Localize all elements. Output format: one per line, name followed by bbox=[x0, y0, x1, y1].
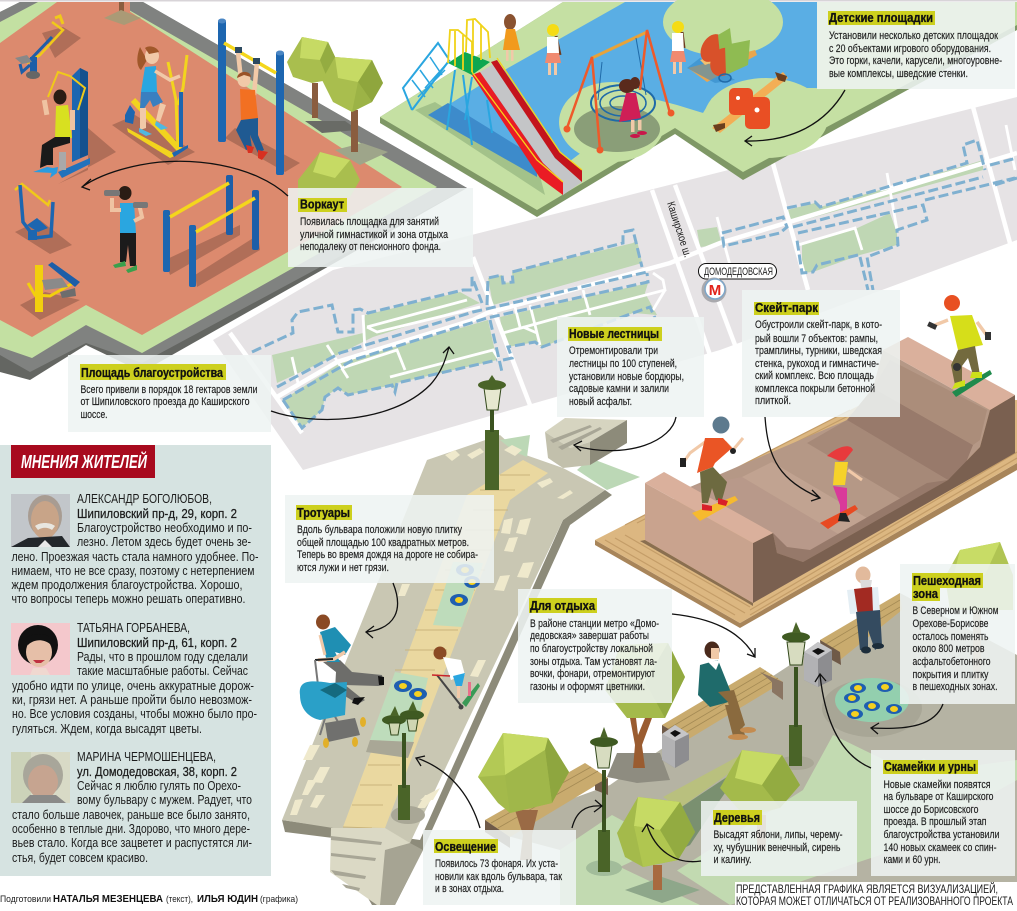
callout: improvement area: шоссе. bbox=[80, 409, 108, 421]
playground platform bbox=[380, 0, 1017, 217]
callout: lighting: Освещение bbox=[435, 840, 496, 854]
callout: benches and bins: шоссе до Борисовского bbox=[884, 804, 978, 816]
opinion: Bogolyubov: Благоустройство необходимо и по- bbox=[77, 520, 252, 535]
callout: skate park: комплекса покрыли бетонной bbox=[755, 383, 875, 395]
playground: spring rocker with parrots bbox=[687, 28, 757, 83]
callout: sidewalks: Вдоль бульвара положили новую плитку bbox=[297, 524, 462, 536]
callout: for rest: дедовская» завершат работы bbox=[530, 630, 649, 642]
bench: middle with sitting man bbox=[662, 642, 783, 752]
opinion: Bogolyubov: ждем продолжения благоустройства. Хорошо, bbox=[12, 577, 242, 592]
opinion: Gorbaneva: Рады, что в прошлом году сделали bbox=[77, 649, 248, 664]
skater: orange shirt bbox=[680, 416, 743, 521]
boulevard: stairs bbox=[330, 418, 627, 905]
opinion: Gorbaneva: ки, грязи нет. А раньше пройти было невозмож- bbox=[12, 692, 252, 707]
callout: skate park: трамплины, турники, шведская bbox=[755, 345, 882, 357]
photo: Gorbaneva bbox=[11, 623, 70, 675]
credits bbox=[0, 893, 298, 905]
callout: improvement area: от Шипиловского проезда до Каширского bbox=[80, 396, 250, 408]
map of the boulevard bbox=[213, 97, 1017, 470]
callout: trees: ху, чубушник венечный, сирень bbox=[714, 842, 841, 854]
arrow: benches and bins bbox=[815, 674, 871, 768]
callout: new stairs: лестницы по 100 ступеней, bbox=[569, 358, 677, 370]
callout: pedestrian zone: в пешеходных зонах. bbox=[912, 681, 998, 693]
callout: pedestrian zone: Пешеходная bbox=[913, 574, 981, 588]
callout: sidewalks: общей площадью 100 квадратных метров. bbox=[297, 537, 469, 549]
lamp: boulevard top bbox=[478, 375, 506, 490]
callout: new stairs: новый асфальт. bbox=[569, 396, 632, 408]
man with stroller bbox=[300, 614, 384, 748]
callout: for rest: Для отдыха bbox=[530, 599, 596, 613]
opinion: Chermoshentseva: стало больше лавочек, раньше все было занято, bbox=[12, 807, 250, 822]
arrow: sidewalks bbox=[366, 583, 398, 638]
tree: right top bbox=[945, 542, 1013, 680]
callout: sidewalks: Теперь во время дождя на дороге не собира- bbox=[297, 549, 478, 561]
arrow: skate park bbox=[765, 417, 820, 501]
callout: trees: Деревья bbox=[714, 811, 760, 825]
callout: new stairs: садовые камни и залили bbox=[569, 383, 669, 395]
callout: lighting bbox=[423, 830, 576, 905]
arrow: children's playgrounds bbox=[745, 90, 845, 146]
heading: residents' opinions bbox=[11, 445, 155, 478]
metro station label: ДОМОДЕДОВСКАЯ bbox=[704, 266, 773, 278]
callout: skate park: стенка, рукоход и гимнастиче- bbox=[755, 358, 879, 370]
arrows: lighting bbox=[416, 756, 602, 828]
boulevard: flower beds bbox=[394, 564, 480, 700]
opinion: Chermoshentseva: Сейчас я люблю гулять по Орехо- bbox=[77, 778, 241, 793]
tree: B bbox=[617, 797, 695, 890]
workout: bench machine bbox=[28, 262, 80, 312]
lamp: double boulevard bbox=[382, 701, 425, 824]
callout: sidewalks: ются лужи и нет грязи. bbox=[297, 562, 389, 574]
urns bbox=[662, 642, 832, 768]
callout: pedestrian zone: зона bbox=[913, 587, 939, 601]
opinion: Bogolyubov: АЛЕКСАНДР БОГОЛЮБОВ, bbox=[77, 491, 212, 506]
callout: benches and bins: Скамейки и урны bbox=[884, 760, 976, 774]
callout: skate park: рый вошли 7 объектов: рампы, bbox=[755, 333, 878, 345]
playground: slide bbox=[403, 19, 582, 195]
workout: parallel bars bbox=[163, 175, 259, 287]
opinion: Gorbaneva: Шипиловский пр-д, 61, корп. 2 bbox=[77, 635, 237, 650]
opinion: Bogolyubov: Шипиловский пр-д, 29, корп. 2 bbox=[77, 506, 237, 521]
metro station label bbox=[698, 264, 776, 302]
callout: children's playgrounds: вые комплексы, шведские стенки. bbox=[829, 68, 968, 80]
opinion: Chermoshentseva: особенно в теплые дни. Здорово, что много дере- bbox=[12, 821, 250, 836]
panel: residents' opinions bbox=[0, 445, 271, 876]
lamp: middle bbox=[586, 727, 622, 876]
callout: for rest: зоны отдыха. Там установят ла- bbox=[530, 656, 657, 668]
arrow: new stairs bbox=[574, 417, 676, 451]
callout: benches and bins: ками и 60 урн. bbox=[884, 854, 940, 866]
credits: (текст), bbox=[166, 894, 193, 905]
workout: woman on elliptical bbox=[125, 46, 188, 158]
opinion: Chermoshentseva: вому бульвару с мужем. Радует, что bbox=[77, 792, 252, 807]
arrow: improvement area bbox=[271, 347, 454, 419]
opinion: Gorbaneva: но. Все условия созданы, чтобы можно было про- bbox=[12, 706, 257, 721]
callout: lighting: новили как вдоль бульвара, так bbox=[435, 871, 562, 883]
credits: (графика) bbox=[260, 894, 298, 905]
visualization disclaimer bbox=[735, 881, 1017, 911]
opinion: Bogolyubov: лезно. Летом здесь будет очень зе- bbox=[77, 534, 251, 549]
callout: benches and bins: Новые скамейки появятся bbox=[884, 779, 991, 791]
workout: cross-trainer bbox=[15, 184, 53, 240]
callout: pedestrian zone: асфальтобетонного bbox=[912, 656, 990, 668]
skater: girl bbox=[820, 446, 862, 529]
workout: man with dumbbells bbox=[104, 186, 148, 273]
callout: new stairs: Отремонтировали три bbox=[569, 345, 658, 357]
opinion: Bogolyubov: лено. Проезжая часть стала намного удобнее. По- bbox=[12, 549, 258, 564]
metro station label: М bbox=[709, 282, 721, 299]
callout: new stairs bbox=[557, 317, 704, 417]
callout: for rest: В районе станции метро «Домо- bbox=[530, 618, 659, 630]
callout: for rest: вочки, фонари, отремонтируют bbox=[530, 668, 655, 680]
credits: ИЛЬЯ ЮДИН bbox=[197, 893, 258, 905]
credits: НАТАЛЬЯ МЕЗЕНЦЕВА bbox=[53, 893, 163, 905]
callout: for rest bbox=[518, 589, 672, 703]
callout: for rest: по благоустройству локальной bbox=[530, 643, 653, 655]
opinion: Bogolyubov: нимаем, что не все сразу, поэтому с нетерпением bbox=[12, 563, 255, 578]
tree: large A bbox=[478, 733, 569, 860]
workout: pull-up bars with man bbox=[218, 18, 284, 175]
workout platform bbox=[0, 2, 467, 380]
opinion: Gorbaneva: такие масштабные работы. Сейчас bbox=[77, 663, 248, 678]
callout: workout bbox=[288, 188, 473, 267]
boy on scooter bbox=[432, 646, 480, 710]
callout: skate park: Обустроили скейт-парк, в кото- bbox=[755, 319, 882, 331]
opinion: Bogolyubov: что вопросы теперь можно решать оперативно. bbox=[12, 591, 246, 606]
callout: pedestrian zone: около 800 метров bbox=[912, 643, 985, 655]
playground: swing with girl bbox=[564, 30, 674, 154]
callout: skate park bbox=[742, 290, 900, 417]
playground: kids bbox=[503, 14, 686, 75]
bench: lower bbox=[485, 763, 608, 848]
lamp: right bbox=[778, 622, 814, 770]
callout: lighting: Появилось 73 фонаря. Их уста- bbox=[435, 858, 558, 870]
callout: improvement area bbox=[68, 355, 271, 432]
callout: workout: неподалеку от пенсионного фонда. bbox=[300, 241, 441, 253]
callout: skate park: ский комплекс. Всю площадь bbox=[755, 370, 874, 382]
callout: sidewalks: Тротуары bbox=[297, 506, 350, 520]
callout: skate park: плиткой. bbox=[755, 395, 791, 407]
flower bed circle bbox=[822, 678, 922, 737]
workout: seated press with man bbox=[33, 68, 90, 178]
callout: trees bbox=[701, 801, 857, 876]
opinion: Chermoshentseva: стья, будет совсем красиво. bbox=[12, 850, 148, 865]
heading: residents' opinions: МНЕНИЯ ЖИТЕЛЕЙ bbox=[21, 451, 148, 472]
playground: seesaw bbox=[712, 72, 788, 133]
callout: skate park: Скейт-парк bbox=[755, 301, 819, 315]
opinion: Gorbaneva: удобно идти по улице, очень аккуратные дорож- bbox=[12, 678, 254, 693]
callout: new stairs: Новые лестницы bbox=[569, 327, 659, 341]
Kashirskoe highway label: Каширское ш. bbox=[664, 200, 693, 259]
opinion: Gorbaneva bbox=[12, 620, 257, 736]
tree: C bbox=[720, 750, 800, 850]
opinion: Chermoshentseva: вьев стало. Когда все зацветет и распустятся ли- bbox=[12, 835, 252, 850]
callout: workout: Воркаут bbox=[300, 198, 344, 212]
workout: rider machine bbox=[15, 16, 63, 79]
opinion: Chermoshentseva bbox=[12, 749, 252, 865]
opinion: Gorbaneva: гуляться. Ждем, когда высадят цветы. bbox=[12, 721, 202, 736]
white footer strip bbox=[0, 906, 1017, 911]
callout: workout: Появилась площадка для занятий bbox=[300, 216, 439, 228]
callout: children's playgrounds: Детские площадки bbox=[829, 11, 933, 25]
workout: trees bbox=[287, 37, 383, 197]
callout: pedestrian zone: покрытия и плитку bbox=[912, 669, 989, 681]
arrow: pedestrian zone bbox=[871, 704, 943, 734]
opinion: Bogolyubov bbox=[12, 491, 258, 606]
arrow: workout bbox=[82, 161, 288, 196]
callout: sidewalks bbox=[285, 495, 494, 583]
callout: improvement area: Площадь благоустройства bbox=[81, 366, 224, 380]
arrow: for rest bbox=[672, 614, 755, 657]
callout: children's playgrounds bbox=[817, 2, 1015, 89]
photo: Chermoshentseva bbox=[11, 752, 70, 803]
arrow: trees bbox=[642, 824, 701, 862]
skater: top right bbox=[927, 295, 992, 397]
callout: pedestrian zone: Орехове-Борисове bbox=[912, 618, 988, 630]
callout: for rest: газоны и оформят цветники. bbox=[530, 681, 645, 693]
callout: benches and bins bbox=[871, 750, 1015, 876]
bench: right with old man bbox=[820, 566, 902, 665]
callout: trees: Высадят яблони, липы, черему- bbox=[714, 829, 843, 841]
callout: improvement area: Всего привели в порядок 18 гектаров земли bbox=[80, 384, 258, 396]
callout: workout: уличной гимнастикой и зона отдыха bbox=[300, 229, 449, 241]
opinion: Gorbaneva: ТАТЬЯНА ГОРБАНЕВА, bbox=[77, 620, 190, 635]
skate park deck bbox=[595, 400, 1017, 628]
callout: pedestrian zone: осталось поменять bbox=[912, 631, 989, 643]
tree: centre bbox=[605, 643, 685, 768]
callout: benches and bins: проезда. В прошлый этап bbox=[884, 816, 987, 828]
skate ramp bbox=[645, 337, 1015, 603]
rest area ground bbox=[485, 593, 1017, 905]
opinion: Chermoshentseva: ул. Домодедовская, 38, корп. 2 bbox=[77, 764, 237, 779]
callout: new stairs: установили новые бордюры, bbox=[569, 371, 684, 383]
callout: pedestrian zone bbox=[900, 564, 1015, 704]
photo: Bogolyubov bbox=[11, 494, 70, 547]
opinion: Chermoshentseva: МАРИНА ЧЕРМОШЕНЦЕВА, bbox=[77, 749, 216, 764]
boulevard walkway bbox=[282, 435, 640, 905]
callout: lighting: и в зонах отдыха. bbox=[435, 883, 504, 895]
callout: trees: и калину. bbox=[714, 854, 752, 866]
credits: Подготовили bbox=[0, 894, 51, 905]
